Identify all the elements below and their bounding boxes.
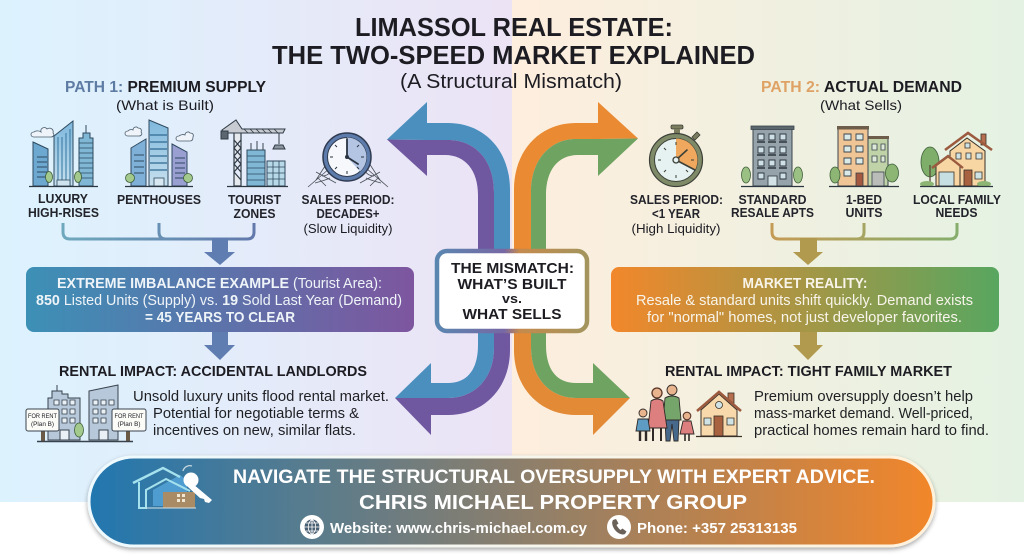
panel: extreme imbalance example bbox=[26, 267, 414, 332]
heading: path 1: PATH 1: PREMIUM SUPPLY bbox=[65, 79, 266, 96]
icon: for rent buildings bbox=[26, 385, 146, 442]
text: rental impact right: practical homes remain hard to find. bbox=[754, 423, 989, 439]
text: rental impact left bbox=[133, 389, 389, 439]
icon: phone bbox=[607, 515, 631, 539]
text: call to action: CHRIS MICHAEL PROPERTY GROUP bbox=[359, 492, 747, 514]
callout: the mismatch: THE MISMATCH: bbox=[451, 260, 574, 277]
icon: standard resale apartments bbox=[741, 126, 804, 186]
label: local family needs: LOCAL FAMILY bbox=[913, 193, 1002, 207]
text: rental impact left: Potential for negotiable terms & bbox=[153, 406, 359, 422]
label: sales period decades bbox=[302, 193, 394, 236]
arrow: down to market reality bbox=[793, 238, 823, 265]
text: rental impact right: mass-market demand. Well-priced, bbox=[754, 406, 973, 422]
label: luxury high-rises: LUXURY bbox=[38, 192, 89, 206]
label: penthouses: PENTHOUSES bbox=[117, 193, 201, 207]
label: high-rises line: HIGH-RISES bbox=[28, 206, 99, 220]
background: left half bbox=[0, 0, 512, 502]
heading: path 2: PATH 2: ACTUAL DEMAND bbox=[761, 79, 962, 96]
text: rental impact left: incentives on new, similar flats. bbox=[153, 423, 356, 439]
icon: globe bbox=[300, 515, 324, 539]
title bbox=[272, 12, 755, 93]
label: sales period under one year bbox=[630, 193, 723, 236]
text: rental impact right: Premium oversupply doesn’t help bbox=[754, 389, 973, 405]
label: tourist zones: TOURIST bbox=[228, 193, 281, 207]
text: rental impact right bbox=[754, 389, 989, 439]
panel: market reality: MARKET REALITY: bbox=[742, 275, 868, 292]
callout: the mismatch: vs. bbox=[502, 291, 522, 306]
label: local family needs: NEEDS bbox=[936, 206, 978, 220]
label: standard resale apts: STANDARD bbox=[738, 193, 806, 207]
text: website: Website: www.chris-michael.com.cy bbox=[330, 521, 587, 537]
title: (A Structural Mismatch) bbox=[400, 71, 622, 93]
icon: for rent buildings: FOR RENT bbox=[114, 413, 144, 420]
heading: path 1 bbox=[65, 79, 266, 113]
icon: construction crane tourist zones bbox=[221, 120, 288, 186]
text: phone: Phone: +357 25313135 bbox=[637, 521, 797, 537]
arrow: down to tight family market bbox=[793, 332, 823, 360]
callout: the mismatch: WHAT SELLS bbox=[462, 306, 562, 323]
text: call to action bbox=[233, 466, 875, 514]
icon: luxury high-rises bbox=[29, 121, 98, 186]
label: one-bed units: UNITS bbox=[846, 206, 882, 220]
label: sales period under one year: SALES PERIOD: bbox=[630, 193, 723, 207]
label: sales period under one year: (High Liquidity) bbox=[632, 221, 720, 236]
arrow: top right bbox=[514, 102, 638, 252]
bracket connector: path 1 bbox=[63, 223, 254, 239]
label: sales period decades: SALES PERIOD: bbox=[302, 193, 394, 207]
arrow: bottom left bbox=[395, 330, 510, 435]
panel: market reality: Resale & standard units shift quickly. Demand exists bbox=[636, 292, 973, 309]
arrow: down to imbalance box bbox=[204, 238, 235, 265]
title: LIMASSOL REAL ESTATE: bbox=[355, 12, 673, 42]
label: sales period decades: DECADES+ bbox=[316, 207, 380, 221]
arrow: bottom right bbox=[514, 330, 630, 435]
icon: for rent buildings: (Plan B) bbox=[118, 421, 140, 428]
background: right half bbox=[512, 0, 1024, 502]
icon: family and house bbox=[636, 385, 742, 441]
icon: local family house bbox=[920, 133, 993, 187]
label: standard resale apts bbox=[731, 193, 814, 220]
label: local family needs bbox=[913, 193, 1002, 220]
footer pill bbox=[89, 457, 934, 546]
text: rental impact left: Unsold luxury units flood rental market. bbox=[133, 389, 389, 405]
icon: house and key bbox=[133, 466, 212, 508]
label: one-bed units bbox=[846, 193, 882, 220]
arrow: down to rental impact bbox=[204, 332, 235, 360]
icon: clock with cobwebs bbox=[308, 133, 388, 187]
icon: for rent buildings: FOR RENT bbox=[28, 413, 57, 420]
panel: extreme imbalance example: = 45 YEARS TO CLEAR bbox=[145, 309, 295, 326]
panel: path 2 actual demand bbox=[611, 79, 1002, 441]
heading: rental impact accidental landlords: RENTAL IMPACT: ACCIDENTAL LANDLORDS bbox=[59, 363, 367, 380]
panel: extreme imbalance example: EXTREME IMBALANCE EXAMPLE (Tourist Area): bbox=[57, 275, 382, 292]
label: one-bed units: 1-BED bbox=[846, 193, 882, 207]
callout: the mismatch bbox=[437, 251, 587, 331]
panel: market reality: for "normal" homes, not just developer favorites. bbox=[647, 309, 962, 326]
panel: extreme imbalance example: 850 Listed Units (Supply) vs. 19 Sold Last Year (Demand) bbox=[36, 292, 402, 309]
heading: path 2 bbox=[761, 79, 962, 113]
panel: central diverging arrows bbox=[387, 102, 638, 435]
bracket connector: path 2 bbox=[772, 223, 957, 239]
panel: path 1 premium supply bbox=[26, 79, 414, 442]
callout: the mismatch: WHAT’S BUILT bbox=[458, 276, 566, 293]
panel: market reality bbox=[611, 267, 999, 332]
heading: path 1: (What is Built) bbox=[116, 97, 214, 113]
text: call to action: NAVIGATE THE STRUCTURAL OVERSUPPLY WITH EXPERT ADVICE. bbox=[233, 466, 875, 488]
label: standard resale apts: RESALE APTS bbox=[731, 206, 814, 220]
heading: rental impact tight family market: RENTAL IMPACT: TIGHT FAMILY MARKET bbox=[665, 363, 952, 380]
panel: footer call to action bbox=[89, 457, 934, 546]
title: THE TWO-SPEED MARKET EXPLAINED bbox=[272, 40, 755, 70]
label: sales period under one year: <1 YEAR bbox=[652, 207, 700, 221]
label: zones line: ZONES bbox=[234, 207, 276, 221]
arrow: top left bbox=[387, 102, 510, 252]
heading: path 2: (What Sells) bbox=[820, 97, 902, 113]
icon: stopwatch bbox=[650, 125, 702, 186]
label: sales period decades: (Slow Liquidity) bbox=[304, 221, 392, 236]
icon: for rent buildings: (Plan B) bbox=[31, 421, 54, 428]
icon: penthouses bbox=[125, 120, 193, 186]
icon: one-bed units bbox=[829, 126, 899, 186]
